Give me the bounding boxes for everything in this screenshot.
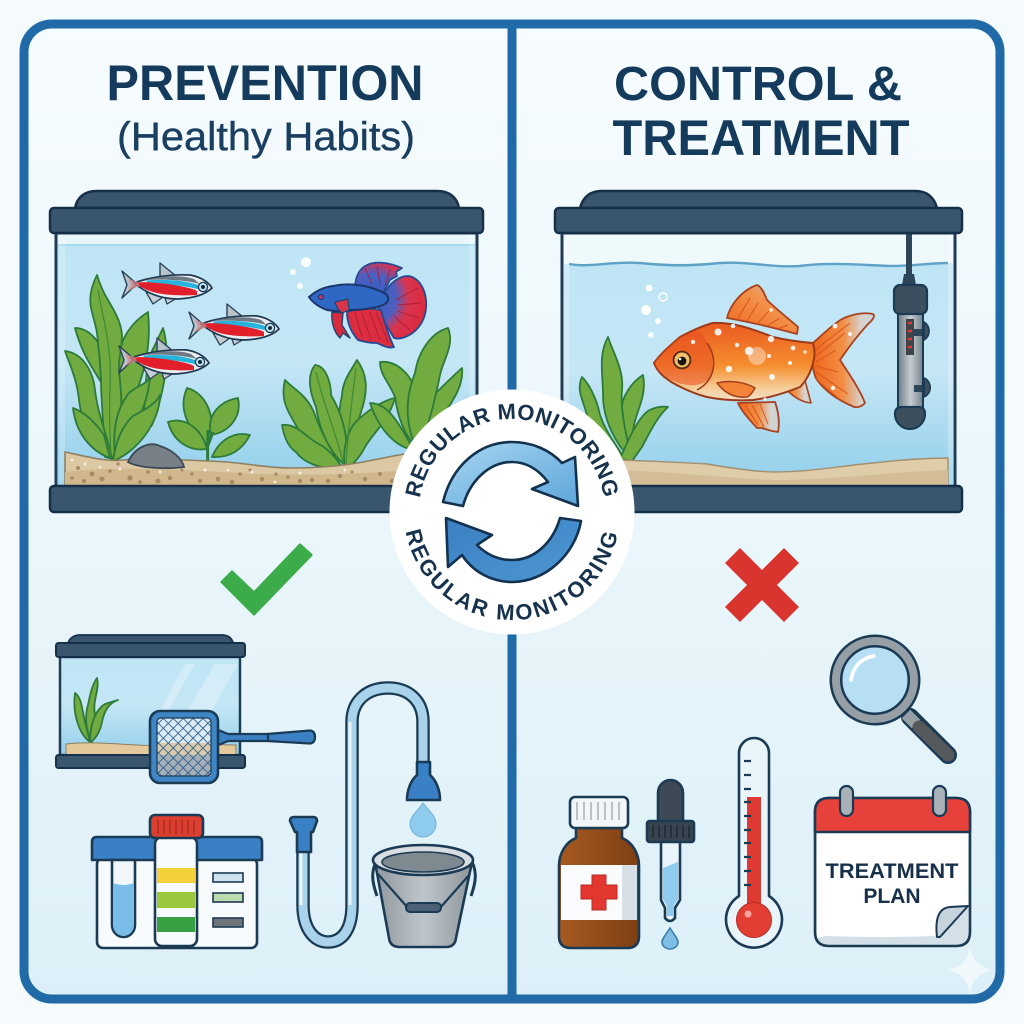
kit colour labels [213,873,243,927]
neon tetra fish 1 [122,263,212,304]
plant: large tall [65,275,167,461]
heading: prevention: PREVENTION [106,55,424,111]
icon: dropper [647,780,694,949]
tank lid [50,191,483,233]
cycle arrow upper [443,442,578,506]
icon: magnifying glass [836,641,948,755]
betta body [309,284,388,311]
plant [580,337,668,461]
hose intake [290,817,317,852]
tank base [555,486,962,512]
icon: small tank with net [56,635,315,783]
goldfish tail [812,313,874,407]
icon: red cross mark [725,548,799,622]
small tank [56,635,245,768]
heading: control and treatment [612,58,910,166]
goldfish gill [697,343,714,390]
sand substrate [65,452,410,485]
betta eye [318,294,324,300]
betta fish [309,263,426,348]
icon: thermometer [726,738,782,948]
icon: water test kit [92,815,262,948]
goldfish with white spots [654,285,874,432]
water droplet [410,803,436,837]
treatment aquarium [555,191,962,512]
plant: small ovate [168,388,250,470]
decorative sparkle [948,946,992,994]
panel: control and treatment [555,58,970,949]
bubbles [290,257,311,289]
badge: regular monitoring [390,390,634,634]
goldfish anal fin [780,373,811,403]
test strip vial [150,815,203,946]
hose nozzle [407,762,440,800]
icon: medicine bottle [559,797,639,948]
sand [600,458,948,485]
betta dorsal fin [355,263,402,293]
heading: control and treatment: TREATMENT [612,110,910,166]
goldfish white spots [691,308,852,400]
healthy aquarium [50,191,483,512]
water [564,263,953,485]
betta ventral fin [332,312,350,338]
goldfish pectoral fin [717,382,755,397]
betta pectoral fin [335,299,349,313]
water [58,245,475,485]
icon: treatment plan calendar: PLAN [863,885,921,908]
circular label top: REGULAR MONITORING [405,404,618,497]
text arcs [404,419,620,620]
test tube [112,860,135,937]
icon: treatment plan calendar [815,786,970,946]
goldfish eye [674,352,690,368]
goldfish ventral fin [738,402,779,432]
rock [128,444,184,468]
neon tetra fish 3 [119,338,209,379]
tank glass [562,233,955,486]
circular label bottom: REGULAR MONITORING [406,529,616,620]
tank glass [56,233,477,486]
tank lid [555,191,962,233]
goldfish body [654,323,814,400]
plant: centre wavy [282,360,395,469]
subheading: healthy habits: (Healthy Habits) [117,115,415,159]
tank base [50,486,483,512]
fish net [150,711,315,783]
calendar label: TREATMENT [826,860,959,883]
betta tail fan [365,266,426,339]
plant: right wavy [370,328,462,450]
goldfish dorsal fin [727,285,798,334]
drop [662,928,678,949]
icon: bucket [373,845,475,947]
bubbles [641,285,667,338]
cycle arrow lower [446,518,581,582]
betta lower fin [347,309,394,348]
icon: green check mark [222,545,311,614]
icon: siphon hose [290,688,440,942]
goldfish head [654,331,713,385]
aquarium heater [894,233,930,429]
heading: control and treatment: CONTROL & [614,58,902,111]
neon tetra fish 2 [189,304,279,345]
